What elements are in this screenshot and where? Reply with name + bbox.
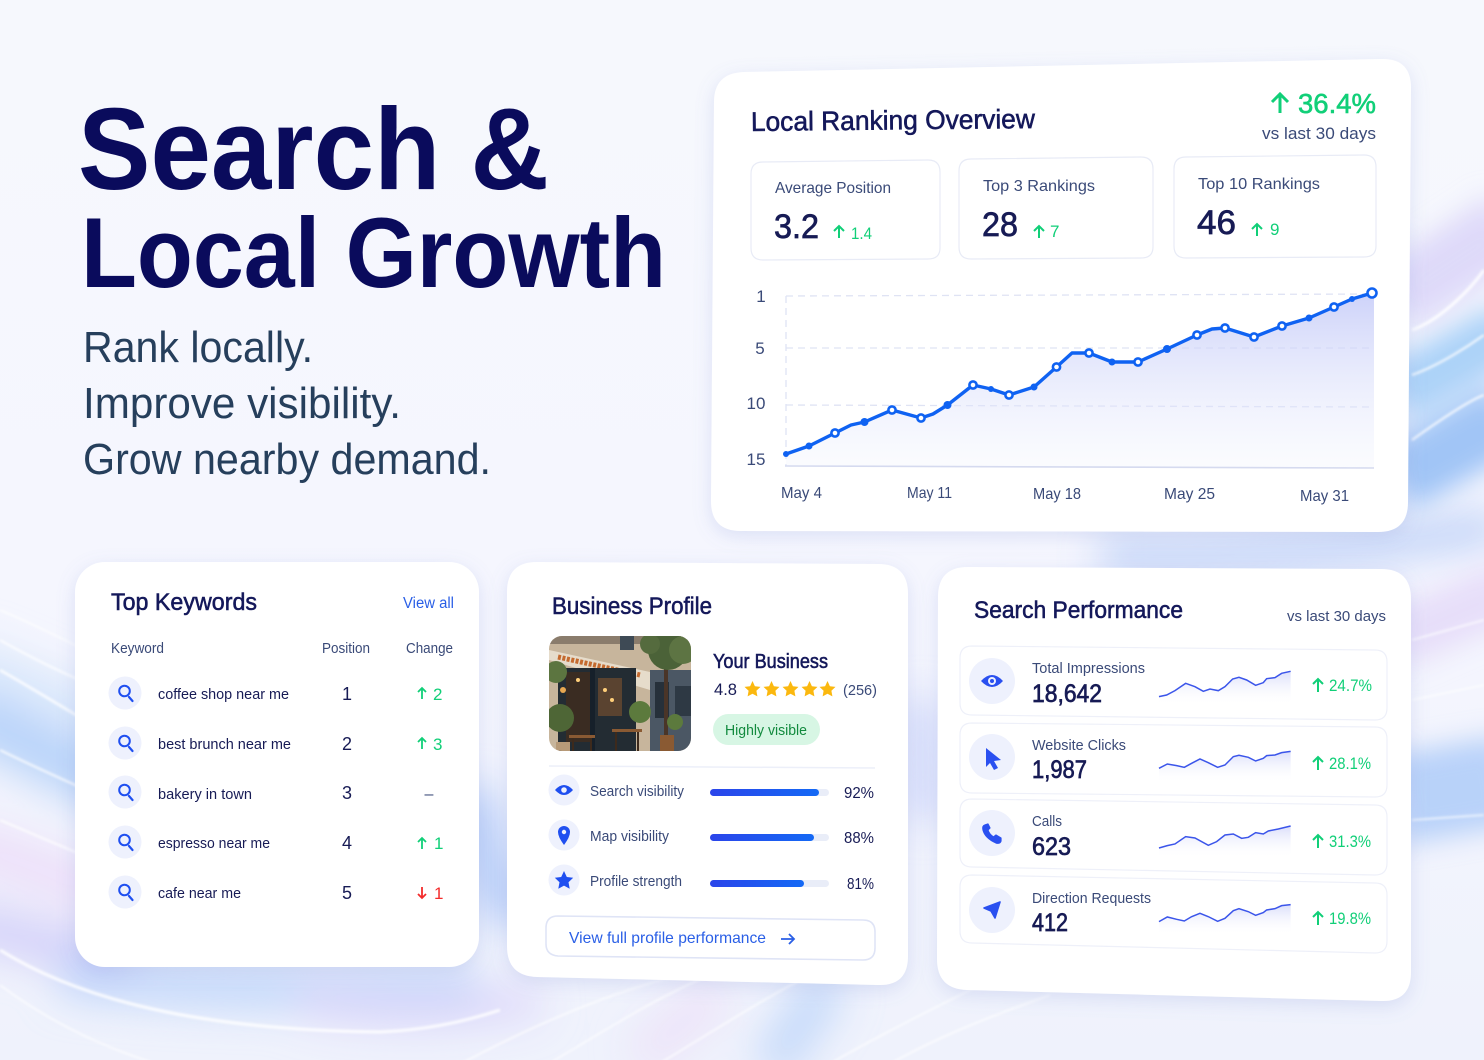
rating xyxy=(714,680,877,699)
panel: local ranking overview xyxy=(711,59,1411,532)
keyword row 5: 1 xyxy=(434,884,443,903)
keyword row 1: coffee shop near me xyxy=(158,686,289,703)
row: direction requests: 412 xyxy=(1032,909,1068,937)
line chart: ranking over time xyxy=(747,287,1376,505)
row: calls xyxy=(960,799,1387,875)
panel: business profile xyxy=(507,562,908,985)
row: website clicks: 1,987 xyxy=(1032,756,1087,784)
sparkline xyxy=(1159,751,1291,783)
chart markers xyxy=(783,288,1376,457)
table header: Position xyxy=(322,641,370,657)
badge: highly visible xyxy=(713,714,820,745)
link: view all: View all xyxy=(403,595,454,612)
keyword row 1: 2 xyxy=(433,685,442,704)
keyword row 2: best brunch near me xyxy=(158,736,291,753)
table header: Change xyxy=(406,641,453,657)
metric: map visibility xyxy=(548,820,874,850)
row: calls: 31.3% xyxy=(1329,832,1371,851)
keyword row 3: bakery in town xyxy=(158,786,252,803)
title xyxy=(78,84,666,308)
keyword row 1 xyxy=(108,676,442,710)
row: direction requests xyxy=(960,875,1387,953)
stat: average position: 1.4 xyxy=(851,224,872,243)
metric: search visibility: 92% xyxy=(844,785,874,802)
row: total impressions: Total Impressions xyxy=(1032,660,1145,677)
button: view full profile performance: View full profile performance xyxy=(569,930,766,947)
photo: cafe storefront xyxy=(549,636,691,751)
keyword row 4: 1 xyxy=(434,834,443,853)
subtitle: Grow nearby demand. xyxy=(83,435,491,484)
keyword row 5: 5 xyxy=(342,883,352,903)
keyword row 4 xyxy=(108,826,443,858)
table header: Keyword xyxy=(111,641,164,657)
panel: search performance xyxy=(937,567,1411,1001)
row: total impressions: 18,642 xyxy=(1032,680,1102,708)
panel: top keywords xyxy=(75,562,479,967)
heading: search performance: Search Performance xyxy=(974,597,1183,624)
chart area fill xyxy=(786,292,1374,468)
overall change xyxy=(1262,88,1376,143)
stat: top 10 rankings: 9 xyxy=(1270,220,1279,239)
sparkline xyxy=(1159,671,1291,705)
keyword row 2: 2 xyxy=(342,734,352,754)
keyword row 3: – xyxy=(425,786,434,803)
rating: 4.8 xyxy=(714,680,737,699)
row: website clicks: Website Clicks xyxy=(1032,737,1126,754)
metric: search visibility: Search visibility xyxy=(590,784,685,800)
title: Search & xyxy=(78,84,549,214)
stat: top 3 rankings: 7 xyxy=(1050,222,1059,241)
metric: profile strength: Profile strength xyxy=(590,874,682,890)
stat: top 10 rankings: Top 10 Rankings xyxy=(1198,176,1320,193)
stat: average position: Average Position xyxy=(775,180,891,197)
chart y axis labels: 5 xyxy=(755,339,765,358)
metric: search visibility xyxy=(548,774,874,806)
chart y axis labels: 10 xyxy=(747,394,765,413)
subtitle xyxy=(83,323,491,484)
row: direction requests: 19.8% xyxy=(1329,909,1371,928)
overall change: 36.4% xyxy=(1298,88,1376,119)
badge: highly visible: Highly visible xyxy=(725,722,807,739)
subtitle: Improve visibility. xyxy=(83,379,401,428)
metric: map visibility: Map visibility xyxy=(590,829,670,845)
sparkline xyxy=(1159,905,1291,935)
stat: average position xyxy=(751,160,940,260)
metric: profile strength: 81% xyxy=(847,876,874,893)
keyword row 1: 1 xyxy=(342,684,352,704)
chart x axis labels: May 31 xyxy=(1300,488,1349,505)
stat: average position: 3.2 xyxy=(774,208,819,246)
stat: top 3 rankings: Top 3 Rankings xyxy=(983,178,1095,195)
chart x axis labels: May 11 xyxy=(907,485,952,502)
keyword row 5 xyxy=(108,876,443,908)
chart x axis labels xyxy=(781,485,1349,505)
rating: (256) xyxy=(843,682,877,699)
chart y axis labels: 1 xyxy=(756,287,766,306)
chart y axis labels xyxy=(747,287,766,469)
icon: five stars xyxy=(744,681,836,696)
sparkline xyxy=(1159,826,1291,858)
title: Local Growth xyxy=(81,197,666,308)
chart x axis labels: May 4 xyxy=(781,485,822,502)
heading: top keywords: Top Keywords xyxy=(111,589,257,616)
row: calls: Calls xyxy=(1032,813,1062,830)
keyword row 5: cafe near me xyxy=(158,885,241,902)
stat: top 3 rankings xyxy=(959,157,1153,259)
keyword row 4: 4 xyxy=(342,833,352,853)
metric: map visibility: 88% xyxy=(844,830,874,847)
keyword row 3: 3 xyxy=(342,783,352,803)
keyword row 2 xyxy=(108,726,442,760)
heading: business profile: Business Profile xyxy=(552,593,712,620)
keyword row 4: espresso near me xyxy=(158,835,270,852)
chart x axis labels: May 18 xyxy=(1033,486,1081,503)
row: website clicks xyxy=(960,723,1387,797)
overall change: vs last 30 days xyxy=(1262,124,1376,143)
chart y axis labels: 15 xyxy=(747,450,765,469)
business name: Your Business xyxy=(713,651,828,673)
button: view full profile performance xyxy=(546,916,875,960)
keyword row 3 xyxy=(108,776,434,808)
table header xyxy=(111,641,453,657)
keyword row 2: 3 xyxy=(433,735,442,754)
comparison note: vs last 30 days xyxy=(1287,608,1386,625)
heading: local ranking overview: Local Ranking Overview xyxy=(751,104,1036,137)
row: direction requests: Direction Requests xyxy=(1032,890,1151,907)
chart x axis labels: May 25 xyxy=(1164,486,1215,503)
chart line xyxy=(786,293,1372,454)
row: total impressions: 24.7% xyxy=(1329,676,1372,695)
stat: top 10 rankings xyxy=(1174,155,1376,258)
row: calls: 623 xyxy=(1032,833,1071,861)
stat: top 10 rankings: 46 xyxy=(1197,204,1236,242)
subtitle: Rank locally. xyxy=(83,323,313,372)
metric: profile strength xyxy=(548,864,874,896)
stat: top 3 rankings: 28 xyxy=(982,206,1018,244)
row: website clicks: 28.1% xyxy=(1329,754,1371,773)
row: total impressions xyxy=(960,646,1387,720)
